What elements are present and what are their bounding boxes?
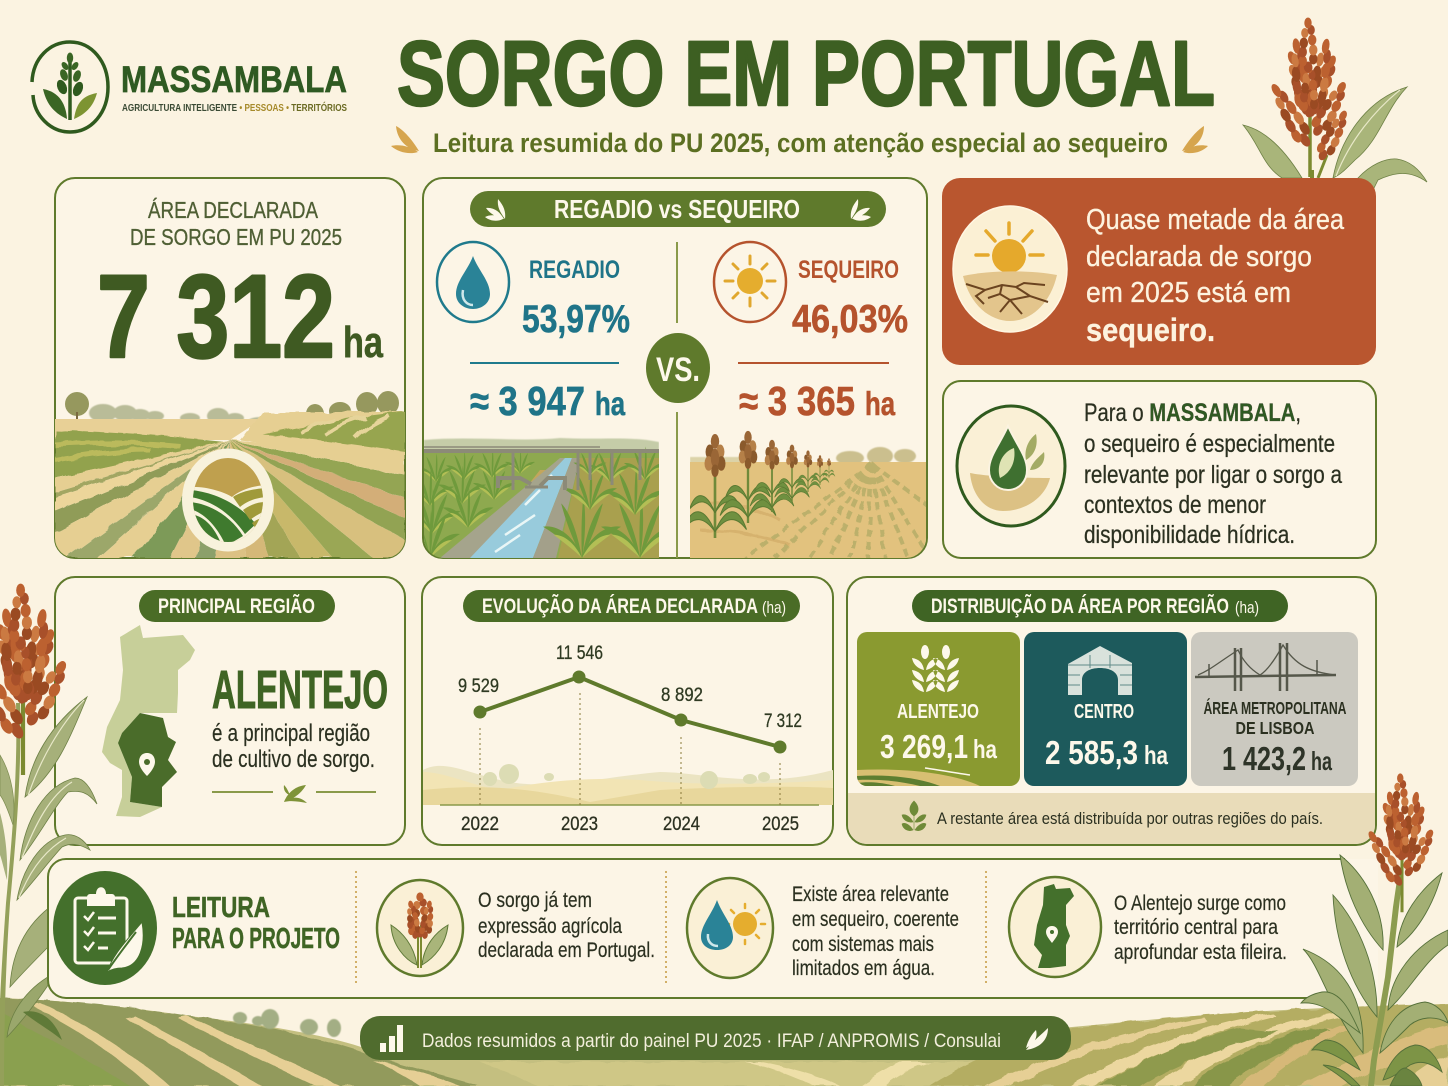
card: Alentejo: 3 269,1 bbox=[880, 728, 968, 765]
bottom landscape of striped fields bbox=[0, 998, 1448, 1086]
panel: callout nearly half rainfed bbox=[942, 178, 1376, 365]
card: Alentejo bbox=[857, 632, 1020, 786]
card: Lisbon metro: 1 423,2 bbox=[1222, 740, 1306, 777]
panel: main region bbox=[55, 577, 405, 845]
year axis: 2023 bbox=[561, 814, 598, 835]
hectares: ≈ 3 947 bbox=[470, 378, 585, 424]
note text: disponibilidade hídrica. bbox=[1084, 521, 1295, 549]
logo emblem bbox=[32, 42, 108, 132]
panel: reading for the project bbox=[48, 859, 1378, 998]
icon: bar chart bbox=[380, 1025, 403, 1052]
icon: stone arch bbox=[1068, 646, 1132, 695]
vs badge bbox=[646, 333, 710, 403]
card: Centro: ha bbox=[1144, 740, 1168, 770]
panel: declared area bbox=[55, 178, 405, 558]
panel heading pill bbox=[912, 590, 1288, 622]
item 1: expressão agrícola bbox=[478, 915, 622, 938]
panel heading pill: (ha) bbox=[762, 598, 786, 617]
card: Alentejo: ha bbox=[973, 734, 997, 764]
card: Centro: CENTRO bbox=[1074, 701, 1134, 723]
panel: Massambala note bbox=[943, 381, 1376, 558]
icon: Portugal map bbox=[1009, 877, 1101, 977]
field illustration bbox=[55, 391, 405, 558]
panel heading pill bbox=[139, 590, 335, 622]
icon: leaf bbox=[1026, 1028, 1048, 1050]
item 2: Existe área relevante bbox=[792, 883, 949, 906]
icon: drop with leaf bbox=[957, 406, 1065, 526]
callout text: sequeiro. bbox=[1086, 312, 1215, 348]
panel heading: LEITURA bbox=[172, 892, 270, 924]
note text: contextos de menor bbox=[1084, 491, 1266, 519]
icon: sprig bbox=[902, 801, 926, 831]
item 2 bbox=[687, 878, 959, 980]
icon: water drop bbox=[437, 242, 509, 322]
card: Centro bbox=[1024, 632, 1187, 786]
item 2: com sistemas mais bbox=[792, 933, 934, 956]
icon: small leaf bbox=[284, 785, 307, 803]
data labels: 7 312 bbox=[764, 711, 802, 732]
rainfed field scene bbox=[690, 430, 926, 558]
title: SORGO EM PORTUGAL bbox=[397, 23, 1215, 125]
percentage: 46,03% bbox=[792, 298, 908, 341]
region name: ALENTEJO bbox=[212, 660, 388, 720]
panel heading pill: DISTRIBUIÇÃO DA ÁREA POR REGIÃO bbox=[931, 595, 1229, 618]
map of Portugal with Alentejo bbox=[102, 625, 195, 817]
unit: ha bbox=[343, 318, 383, 367]
irrigated field scene bbox=[424, 438, 659, 558]
region description: de cultivo de sorgo. bbox=[212, 746, 375, 773]
icon: wheat bbox=[912, 645, 959, 692]
panel heading: DE SORGO EM PU 2025 bbox=[130, 224, 342, 250]
landscape behind chart bbox=[423, 764, 833, 805]
decorative sorghum plant bottom right bbox=[1301, 773, 1448, 1086]
icon: suspension bridge bbox=[1195, 643, 1336, 691]
decorative sorghum plant top right bbox=[1243, 18, 1427, 190]
card: Lisbon metro: DE LISBOA bbox=[1236, 718, 1315, 738]
item 3: território central para bbox=[1114, 916, 1278, 939]
line chart bbox=[423, 643, 833, 835]
callout text bbox=[1086, 204, 1345, 348]
year axis bbox=[461, 814, 799, 835]
callout text: em 2025 está em bbox=[1086, 277, 1291, 309]
icon: location pin bbox=[139, 753, 155, 776]
label: SEQUEIRO bbox=[798, 256, 899, 284]
icon: clipboard with leaf bbox=[53, 871, 157, 985]
item 3: aprofundar esta fileira. bbox=[1114, 941, 1287, 964]
icon: sun over cracked earth bbox=[953, 206, 1067, 332]
card: Centro: 2 585,3 bbox=[1045, 734, 1138, 771]
item 1: O sorgo já tem bbox=[478, 889, 592, 912]
note text: relevante por ligar o sorgo a bbox=[1084, 461, 1342, 489]
note text bbox=[1084, 399, 1342, 549]
subtitle bbox=[391, 126, 1208, 158]
subtitle text: Leitura resumida do PU 2025, com atenção especial ao sequeiro bbox=[433, 128, 1168, 158]
panel heading pill bbox=[463, 590, 800, 622]
panel: regadio vs sequeiro bbox=[400, 178, 960, 558]
footnote band: A restante área está distribuída por outras regiões do país. bbox=[937, 809, 1323, 828]
panel heading pill: EVOLUÇÃO DA ÁREA DECLARADA bbox=[482, 595, 758, 618]
callout text: declarada de sorgo bbox=[1086, 241, 1312, 273]
item 3 bbox=[1009, 877, 1287, 977]
item 3: O Alentejo surge como bbox=[1114, 892, 1286, 915]
data labels: 9 529 bbox=[458, 676, 499, 697]
icon: right sprig bbox=[1182, 126, 1208, 153]
panel: distribution by region bbox=[847, 577, 1376, 845]
panel heading pill: PRINCIPAL REGIÃO bbox=[158, 595, 315, 618]
card: Lisbon metro bbox=[1191, 632, 1358, 786]
card: Lisbon metro: ÁREA METROPOLITANA bbox=[1204, 697, 1347, 718]
callout text: Quase metade da área bbox=[1086, 204, 1345, 236]
header logo: Massambala bbox=[32, 42, 347, 132]
item 2: limitados em água. bbox=[792, 957, 935, 980]
region description bbox=[212, 720, 375, 773]
footnote band bbox=[848, 793, 1375, 844]
panel: area evolution chart bbox=[422, 577, 833, 845]
regadio column bbox=[437, 242, 630, 424]
note text: Para o MASSAMBALA, bbox=[1084, 399, 1301, 427]
item 1 bbox=[377, 880, 655, 976]
panel heading pill bbox=[470, 191, 886, 227]
data labels bbox=[458, 643, 802, 732]
panel heading pill: (ha) bbox=[1235, 598, 1259, 617]
item 1: declarada em Portugal. bbox=[478, 939, 655, 962]
percentage: 53,97% bbox=[522, 298, 630, 341]
panel heading: PARA O PROJETO bbox=[172, 923, 340, 955]
year axis: 2024 bbox=[663, 814, 700, 835]
data labels: 8 892 bbox=[661, 685, 703, 706]
icon: drop and sun bbox=[687, 878, 773, 978]
data labels: 11 546 bbox=[556, 643, 603, 664]
year axis: 2022 bbox=[461, 814, 499, 835]
icon: sorghum plant bbox=[377, 880, 463, 976]
card: Alentejo: ALENTEJO bbox=[897, 701, 979, 723]
tagline: AGRICULTURA INTELIGENTE • PESSOAS • TERRITÓRIOS bbox=[122, 101, 347, 114]
year axis: 2025 bbox=[762, 814, 799, 835]
sources footer pill: Dados resumidos a partir do painel PU 2025 · IFAP / ANPROMIS / Consulai bbox=[422, 1031, 1001, 1052]
panel heading: ÁREA DECLARADA bbox=[148, 197, 319, 223]
sequeiro column bbox=[714, 242, 908, 424]
hectares: ≈ 3 365 bbox=[739, 378, 855, 424]
panel heading bbox=[130, 197, 342, 250]
vs badge: VS. bbox=[656, 351, 700, 389]
wordmark: MASSAMBALA bbox=[121, 59, 347, 100]
note text: o sequeiro é especialmente bbox=[1084, 430, 1335, 458]
panel heading pill: REGADIO vs SEQUEIRO bbox=[554, 194, 800, 224]
item 2: em sequeiro, coerente bbox=[792, 908, 959, 931]
sources footer pill bbox=[360, 1016, 1071, 1060]
hectares: ha bbox=[865, 385, 896, 422]
label: REGADIO bbox=[529, 256, 620, 284]
big number: 7 312 bbox=[97, 251, 335, 383]
panel heading bbox=[172, 892, 340, 955]
icon: sun bbox=[714, 242, 786, 322]
region description: é a principal região bbox=[212, 720, 370, 747]
hectares: ha bbox=[595, 385, 626, 422]
card: Lisbon metro: ha bbox=[1311, 746, 1332, 776]
divider bbox=[676, 242, 678, 558]
decorative sorghum plant left bbox=[0, 584, 97, 1086]
field badge bbox=[182, 448, 274, 552]
icon: left sprig bbox=[391, 126, 419, 153]
